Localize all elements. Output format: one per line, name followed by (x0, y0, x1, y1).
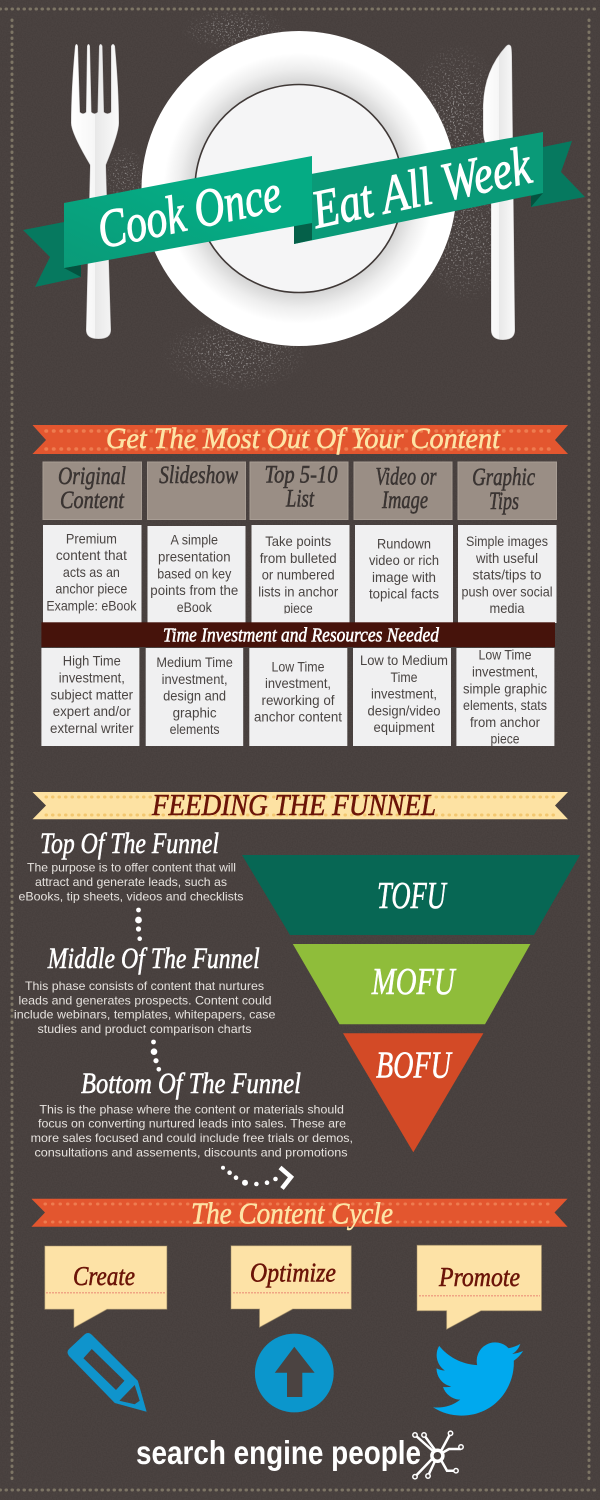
funnel: TOFU (242, 855, 580, 935)
card: original content: anchor piece (55, 581, 128, 597)
funnel (242, 855, 580, 1152)
paragraph: The purpose is to offer content that will (27, 861, 236, 875)
time: list: investment, (265, 675, 331, 691)
bottom of the funnel text: Bottom Of The Funnel (81, 1067, 301, 1100)
logo mark (413, 1431, 463, 1479)
top of the funnel text: Top Of The Funnel (40, 827, 219, 860)
ribbon right: Eat All Week (294, 132, 585, 244)
card: slideshow: A simple (171, 532, 218, 548)
time: graphic: simple graphic (463, 680, 547, 696)
middle of the funnel text: Middle Of The Funnel (47, 942, 260, 975)
top of the funnel text (18, 827, 243, 903)
time: graphic: investment, (472, 664, 538, 680)
card: graphic tips: with useful (475, 550, 538, 566)
banner: get the most (32, 422, 568, 455)
time investment bar (41, 622, 555, 647)
bubble: Create: Create (73, 1261, 135, 1291)
dots connector 2 (151, 1040, 161, 1072)
time: original: external writer (50, 720, 134, 736)
column headers (43, 462, 556, 520)
time: original: investment, (59, 670, 125, 686)
heading: The Content Cycle (191, 1195, 393, 1230)
card: video or image: image with (372, 569, 436, 585)
time: original: High Time (63, 653, 121, 669)
card: video or image: video or rich (369, 552, 439, 568)
paragraph: attract and generate leads, such as (35, 875, 227, 889)
paragraph: focus on converting nurtured leads into sales. These are (38, 1117, 346, 1131)
time: video: design/video (368, 702, 441, 718)
bubble: Promote: Promote (438, 1262, 520, 1292)
paragraph: This is the phase where the content or materials should (39, 1102, 344, 1116)
header: Graphic Tips: Tips (489, 488, 519, 515)
bubble: Promote (417, 1245, 542, 1329)
time: slideshow: Medium Time (156, 654, 233, 670)
header: Original Content: Original (58, 463, 126, 490)
bottom of the funnel text (31, 1067, 353, 1159)
card: video or image: topical facts (369, 586, 439, 602)
paragraph: more sales focused and could include free trials or demos, (31, 1131, 353, 1145)
paragraph: This phase consists of content that nurtures (25, 979, 264, 993)
icon: twitter bird (433, 1342, 523, 1416)
time: graphic: elements, stats (463, 697, 547, 713)
header: Video or Image: Video or (376, 464, 437, 491)
banner: feeding the funnel (32, 787, 568, 822)
time: original: expert and/or (53, 703, 131, 719)
paragraph: include webinars, templates, whitepapers, case (14, 1008, 276, 1022)
bubble: Optimize (231, 1246, 351, 1327)
time: slideshow: design and (163, 688, 226, 704)
funnel: BOFU: BOFU (376, 1045, 453, 1087)
plate (142, 31, 456, 346)
card: original content: acts as an (63, 564, 120, 580)
bar heading: Time Investment and Resources Needed (163, 625, 440, 647)
heading: FEEDING THE FUNNEL (151, 787, 436, 822)
card: graphic tips: stats/tips to (472, 567, 542, 583)
bubble: Optimize: Optimize (250, 1258, 336, 1288)
bubble: Create (45, 1246, 167, 1328)
icon: pencil (68, 1333, 147, 1412)
time: video: Low to Medium (360, 652, 448, 668)
time: slideshow: graphic (173, 704, 217, 720)
card: graphic tips: push over social (462, 583, 552, 599)
dots connector 1 (135, 908, 142, 941)
knife (483, 44, 515, 340)
description cards (43, 525, 556, 623)
card: slideshow: eBook (177, 599, 213, 615)
card: slideshow: based on key (157, 565, 231, 581)
header: Slideshow: Slideshow (159, 462, 238, 489)
time: list: anchor content (254, 709, 342, 725)
time: video: Time (390, 669, 418, 685)
flour speckle (106, 10, 491, 390)
header: Top 5-10 List: List (285, 486, 315, 513)
card: top list: lists in anchor (258, 583, 339, 599)
card: slideshow: points from the (150, 582, 238, 598)
middle of the funnel text (14, 942, 276, 1036)
card: top list: or numbered (262, 567, 335, 583)
card: video or image: Rundown (377, 535, 431, 551)
banner: content cycle (31, 1195, 567, 1230)
funnel: BOFU (343, 1033, 483, 1152)
paragraph: studies and product comparison charts (38, 1022, 252, 1036)
time: video: investment, (371, 686, 437, 702)
time: list: Low Time (272, 658, 325, 674)
card: original content: Premium (66, 530, 117, 546)
heading: Get The Most Out Of Your Content (106, 422, 501, 455)
card: slideshow: presentation (158, 548, 231, 564)
time: slideshow: investment, (162, 671, 228, 687)
header: Original Content: Content (60, 487, 125, 514)
header: Top 5-10 List: Top 5-10 (264, 462, 338, 489)
card: graphic tips: media (490, 600, 525, 616)
paragraph: eBooks, tip sheets, videos and checklists (18, 889, 243, 903)
card: top list: piece (284, 600, 313, 616)
time: graphic: Low Time (478, 647, 532, 663)
funnel: MOFU: MOFU (371, 961, 457, 1003)
time: list: reworking of (262, 692, 335, 708)
title: Cook Once: Cook Once (92, 163, 286, 260)
funnel: MOFU (293, 944, 530, 1024)
paragraph: leads and generates prospects. Content could (18, 993, 272, 1007)
header: Video or Image: Image (381, 487, 428, 514)
time: original: subject matter (51, 686, 133, 702)
logo: search engine people: search engine people (136, 1434, 421, 1471)
title: Eat All Week: Eat All Week (306, 135, 537, 240)
fork (71, 44, 119, 339)
card: top list: from bulleted (260, 550, 337, 566)
card: top list: Take points (265, 533, 331, 549)
paragraph: consultations and assements, discounts and promotions (34, 1145, 348, 1159)
header: Graphic Tips: Graphic (472, 464, 535, 491)
time: graphic: from anchor (470, 714, 540, 730)
time: graphic: piece (490, 731, 520, 747)
icon: up arrow (255, 1334, 334, 1412)
time cards (41, 647, 554, 747)
card: original content: content that (56, 547, 127, 563)
time: slideshow: elements (170, 721, 220, 737)
card: graphic tips: Simple images (466, 533, 548, 549)
time: video: equipment (374, 719, 435, 735)
ribbon left: Cook Once (23, 156, 312, 287)
arrow: dotted to funnel (221, 1166, 291, 1188)
funnel: TOFU: TOFU (377, 875, 448, 917)
card: original content: Example: eBook (46, 598, 137, 614)
